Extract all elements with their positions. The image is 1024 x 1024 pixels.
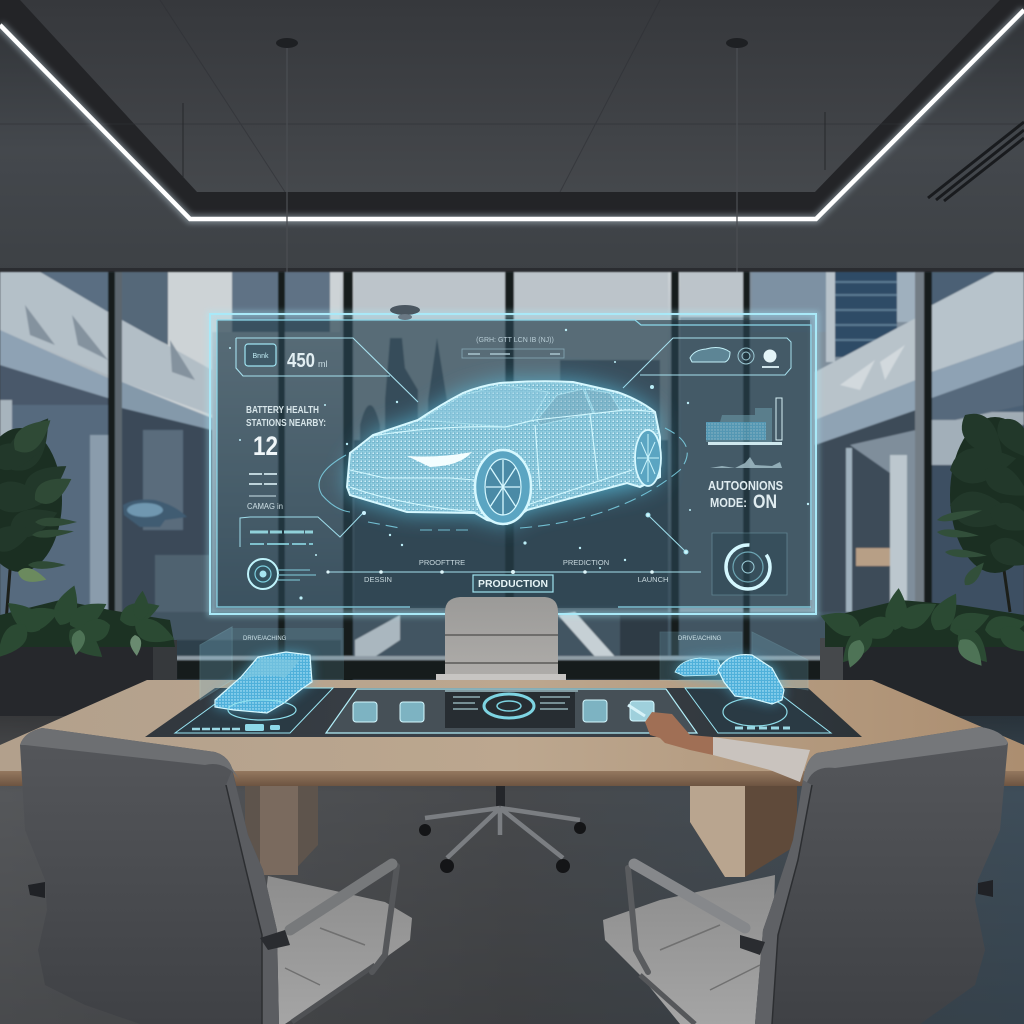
central skyline	[354, 272, 743, 620]
autonomous mode text: MODE:	[710, 495, 747, 510]
left table panel	[175, 688, 333, 733]
left mid city	[122, 272, 340, 652]
small hologram screens	[200, 627, 808, 700]
LED light strip	[0, 10, 1024, 219]
timeline: LAUNCH	[638, 575, 668, 584]
backrest	[20, 728, 279, 1024]
battery health text: STATIONS NEARBY:	[246, 418, 326, 429]
battery health text	[246, 405, 326, 429]
right mid city	[680, 272, 920, 662]
top center header	[462, 337, 564, 358]
hologram car glow	[348, 382, 660, 524]
left chair	[20, 728, 412, 1024]
camera label and glyphs	[247, 474, 283, 511]
backrest	[755, 727, 1008, 1024]
number 12: 12	[253, 431, 278, 461]
front wheel	[475, 450, 531, 524]
range widget: Bnnk	[253, 353, 269, 360]
floating particles	[229, 329, 809, 600]
window view	[0, 272, 1024, 682]
range widget	[236, 338, 418, 402]
tree	[936, 405, 1024, 612]
planter right with plants	[817, 405, 1024, 716]
flying drone	[390, 305, 420, 320]
floor	[0, 716, 1024, 1024]
right chair	[603, 727, 1008, 1024]
range widget: 450	[287, 350, 315, 372]
autonomous mode text: AUTOONIONS	[708, 478, 783, 493]
bracket data block	[240, 511, 366, 547]
ceiling vent	[928, 122, 1024, 201]
timeline: PROOFTTRE	[419, 558, 465, 567]
hologram cars: table right	[675, 655, 785, 704]
left terrace	[0, 272, 108, 640]
timeline: PREDICTION	[563, 558, 609, 567]
low plants	[0, 582, 178, 665]
dial widget left	[248, 559, 316, 589]
table	[0, 680, 1024, 786]
timeline	[326, 558, 701, 592]
low plants	[817, 587, 1024, 671]
center table panel	[326, 689, 697, 733]
ceiling	[0, 0, 1024, 272]
hand and arm	[628, 705, 810, 782]
range widget: ml	[318, 359, 328, 369]
top right widget	[623, 338, 791, 388]
table legs	[245, 785, 797, 877]
battery health text: BATTERY HEALTH	[246, 405, 319, 416]
small hologram screens: DRIVE/ACHING	[243, 636, 287, 642]
timeline: PRODUCTION	[478, 579, 548, 590]
tree	[0, 409, 77, 622]
autonomous mode text: ON	[753, 492, 777, 513]
hologram car	[347, 381, 661, 524]
right terrace	[932, 272, 1024, 640]
flying vehicle left	[123, 500, 187, 527]
camera label and glyphs: CAMAG in	[247, 501, 283, 511]
city below panel	[122, 612, 922, 660]
connector line	[646, 513, 688, 554]
battery bar chart widget	[706, 398, 782, 445]
holographic display panel	[210, 314, 816, 614]
center chair	[436, 597, 566, 681]
hologram car: table left	[215, 652, 312, 720]
autonomous mode text	[708, 478, 783, 513]
timeline: DESSIN	[364, 575, 392, 584]
armrest	[290, 864, 397, 972]
window mullions	[108, 272, 932, 682]
seat	[603, 875, 775, 1024]
seat	[250, 876, 412, 1024]
table touch display	[145, 688, 862, 737]
right table panel	[685, 688, 831, 733]
planter left with plants	[0, 409, 178, 717]
pendant cables	[183, 38, 825, 316]
gauge widget	[712, 533, 787, 595]
top center header: (GRH: GTT LCN IB (NJ))	[476, 337, 554, 344]
center chair base	[419, 770, 586, 873]
small hologram screens: DRIVE/ACHING	[678, 636, 722, 642]
armrest	[628, 864, 745, 972]
waveform	[710, 457, 782, 468]
rear wheel	[635, 430, 661, 486]
orbit ring around car	[319, 428, 687, 530]
